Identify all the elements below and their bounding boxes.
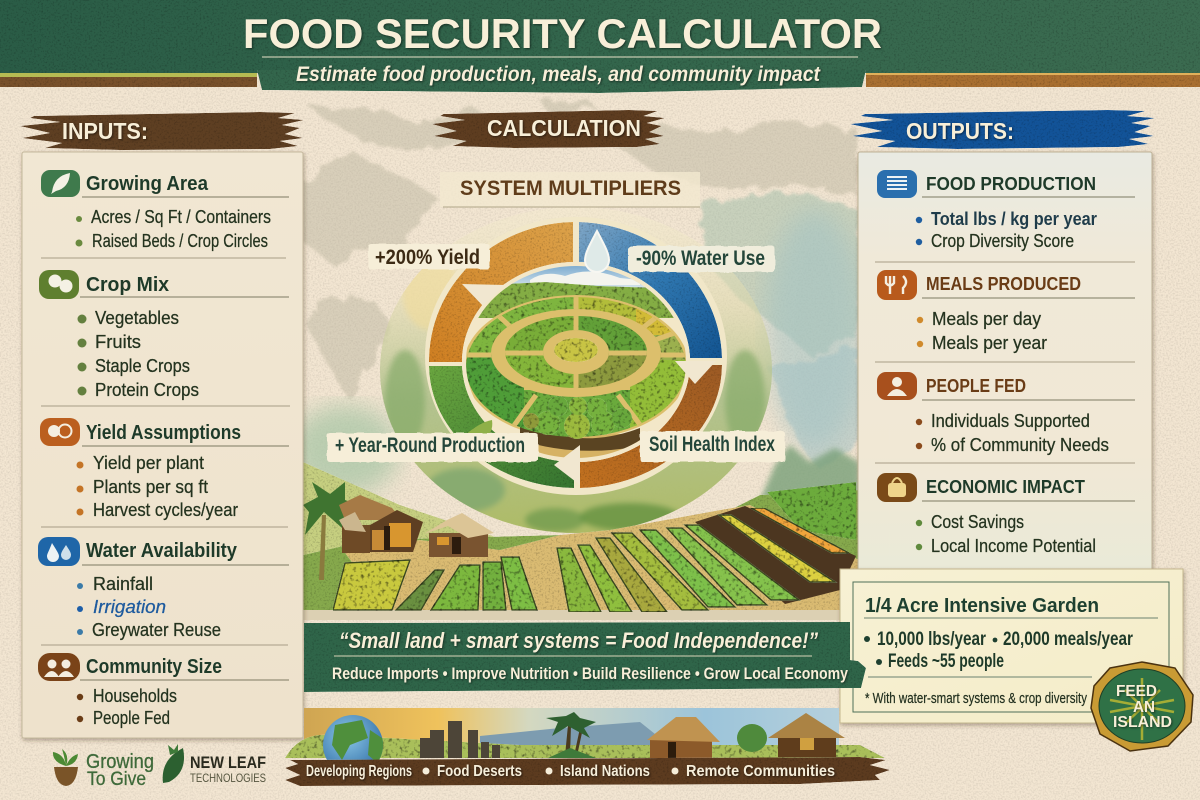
- arrow: ring right: [675, 361, 716, 384]
- pale green haze left: [290, 405, 400, 495]
- section: economic impact: Local Income Potential: [931, 536, 1096, 556]
- section: food production: Crop Diversity Score: [931, 231, 1074, 251]
- section: people fed: % of Community Needs: [931, 435, 1109, 455]
- ring segment: green production: [429, 366, 574, 488]
- label: soil health index: [640, 431, 785, 462]
- section: community size: People Fed: [93, 708, 170, 728]
- section: crop mix: Fruits: [95, 332, 141, 352]
- farm fields illustration: [303, 482, 859, 622]
- icon: people: [38, 653, 80, 681]
- tree line: [478, 282, 674, 318]
- section: meals produced: [877, 270, 1135, 353]
- icon: city towers: [420, 721, 500, 758]
- section: water availability: [38, 537, 289, 640]
- green block crops: [767, 482, 856, 540]
- inner beds: [505, 316, 647, 388]
- regions band: Developing Regions: [306, 763, 412, 780]
- icon: yield: [40, 418, 80, 446]
- logo: growing to give: [53, 749, 154, 790]
- arrow: ring bottom: [554, 445, 580, 485]
- callout: quarter acre garden: [840, 569, 1183, 723]
- section: meals produced: Meals per year: [932, 333, 1047, 353]
- badge: feed an island: AN: [1133, 699, 1155, 716]
- section: economic impact: Cost Savings: [931, 512, 1024, 532]
- arrow: ring top left: [462, 284, 505, 306]
- section: meals produced: MEALS PRODUCED: [926, 274, 1081, 294]
- section: growing area: Raised Beds / Crop Circles: [92, 231, 268, 251]
- icon: stilt hut: [768, 713, 845, 757]
- section: growing area: Growing Area: [86, 173, 209, 195]
- badge: feed an island: [1091, 662, 1193, 751]
- logo: growing to give: To Give: [87, 769, 146, 790]
- subtitle: Estimate food production, meals, and community impact: [296, 63, 821, 86]
- center bed: [554, 338, 598, 362]
- icon: leaves: [39, 270, 79, 299]
- section: yield assumptions: Harvest cycles/year: [93, 500, 238, 520]
- icon: list: [877, 170, 917, 198]
- section: yield assumptions: Yield Assumptions: [86, 422, 241, 444]
- icon: hut: [647, 717, 720, 758]
- scene ground: [285, 735, 885, 758]
- strip right: [866, 73, 1200, 87]
- heading: calculation: CALCULATION: [487, 115, 641, 141]
- section: community size: Households: [93, 686, 177, 706]
- label: year-round production: + Year-Round Production: [335, 434, 525, 457]
- teal haze: [765, 210, 865, 450]
- regions band: Food Deserts: [437, 763, 522, 780]
- logo: growing to give: Growing: [86, 751, 154, 773]
- regions band: Island Nations: [560, 763, 650, 780]
- inner bed spokes: [505, 316, 647, 388]
- section: crop mix: [39, 270, 289, 400]
- section: food production: Total lbs / kg per year: [931, 209, 1097, 229]
- icon: money bag: [877, 473, 917, 502]
- callout: quarter acre garden: 20,000 meals/year: [1003, 629, 1133, 650]
- ring segment: soil brown: [580, 365, 722, 488]
- gravel strip: [304, 610, 840, 620]
- ring outer border: [425, 217, 727, 495]
- scene sky: [304, 708, 839, 758]
- path ground: [463, 295, 689, 439]
- disc tree patches: [385, 250, 765, 532]
- outer soil: [520, 427, 640, 451]
- chart: system multipliers ring: [425, 217, 727, 495]
- section: food production: FOOD PRODUCTION: [926, 174, 1096, 194]
- callout heading: 1/4 Acre Intensive Garden: [865, 595, 1099, 617]
- faint outer disc: [380, 207, 772, 533]
- section: community size: [38, 653, 289, 728]
- icon: leaf: [464, 420, 492, 440]
- callout: quarter acre garden: 10,000 lbs/year: [877, 629, 986, 650]
- label: year-round production: [327, 433, 538, 462]
- icon: left hut: [339, 495, 423, 553]
- section: water availability: Water Availability: [86, 540, 238, 562]
- panel: outputs: [850, 110, 1155, 582]
- logo: new leaf technologies: TECHNOLOGIES: [190, 771, 266, 785]
- bushes: [523, 396, 632, 439]
- icon: globe: [323, 715, 383, 760]
- world map: [300, 100, 860, 470]
- badge: feed an island: FEED: [1116, 683, 1157, 700]
- callout: quarter acre garden: * With water-smart systems & crop diversity: [865, 690, 1087, 707]
- tan ground and path: [345, 505, 859, 612]
- outer beds: [466, 297, 686, 437]
- regions band: Remote Communities: [686, 763, 835, 780]
- logo: new leaf technologies: NEW LEAF: [190, 753, 266, 772]
- icon: tree: [737, 724, 767, 752]
- regions band: [285, 757, 890, 786]
- section: yield assumptions: Yield per plant: [93, 453, 204, 473]
- heading: outputs: OUTPUTS:: [906, 118, 1014, 144]
- left hillside: [304, 462, 495, 555]
- section: crop mix: Protein Crops: [95, 380, 199, 400]
- icon: leaf: [163, 748, 184, 783]
- icon: water drop: [585, 231, 609, 272]
- garden illustration: [466, 266, 686, 458]
- section: meals produced: Meals per day: [932, 309, 1041, 329]
- title: FOOD SECURITY CALCULATOR: [243, 10, 882, 57]
- label: soil health index: Soil Health Index: [649, 433, 775, 456]
- logo: new leaf technologies: [163, 744, 266, 785]
- section: water availability: Greywater Reuse: [92, 620, 221, 640]
- section: growing area: [41, 170, 289, 251]
- section: crop mix: Vegetables: [95, 308, 179, 328]
- background trees right: [758, 443, 858, 496]
- strip left: [0, 72, 257, 87]
- section: water availability: Irrigation: [93, 597, 166, 617]
- dark soil: [695, 506, 856, 604]
- callout: quarter acre garden: Feeds ~55 people: [888, 651, 1004, 672]
- icon: palm trees: [546, 712, 596, 758]
- heading: calculation: [432, 110, 665, 148]
- section: people fed: PEOPLE FED: [926, 376, 1026, 396]
- section: food production: [877, 170, 1135, 251]
- subtitle banner: [257, 70, 866, 93]
- benefits text: Reduce Imports • Improve Nutrition • Build Resilience • Grow Local Economy: [332, 664, 848, 683]
- green meadow: [303, 490, 859, 612]
- section: water availability: Rainfall: [93, 574, 153, 594]
- garden circle border: [462, 262, 690, 462]
- heading: outputs: [850, 110, 1155, 149]
- icon: right hut: [424, 513, 494, 557]
- section: people fed: [877, 372, 1135, 455]
- section: crop mix: Staple Crops: [95, 356, 190, 376]
- heading: system multipliers: [440, 172, 700, 207]
- icon: palm tree: [304, 482, 348, 580]
- section: crop mix: Crop Mix: [86, 274, 169, 296]
- section: community size: Community Size: [86, 656, 222, 678]
- header band: [0, 0, 1200, 93]
- heading: inputs: INPUTS:: [62, 118, 148, 144]
- section: economic impact: [877, 473, 1135, 556]
- outer bed spokes: [467, 297, 685, 426]
- ring segment: water blue: [579, 222, 722, 358]
- bottom scene strip: [285, 708, 890, 786]
- section: yield assumptions: Plants per sq ft: [93, 477, 208, 497]
- section: growing area: Acres / Sq Ft / Containers: [91, 207, 271, 227]
- icon: fork and knife: [877, 270, 917, 300]
- label: +200% yield: +200% Yield: [375, 246, 480, 269]
- quote banner: [304, 622, 866, 692]
- central illustration backdrop: [290, 100, 865, 560]
- heading: inputs: [20, 112, 304, 150]
- clouds: [530, 271, 640, 285]
- crop rows: [333, 508, 849, 612]
- icon: seedling bowl: [53, 749, 78, 786]
- section: economic impact: ECONOMIC IMPACT: [926, 477, 1085, 497]
- heading: system multipliers: SYSTEM MULTIPLIERS: [460, 177, 681, 200]
- section: yield assumptions: [40, 418, 289, 520]
- ring segment: yield orange: [429, 222, 573, 362]
- section: people fed: Individuals Supported: [931, 411, 1090, 431]
- icon: leaf: [41, 170, 80, 197]
- label: -90% water use: -90% Water Use: [636, 247, 765, 270]
- scene distant mountains: [480, 722, 660, 748]
- icon: water drops: [38, 537, 80, 566]
- panel: inputs: [20, 112, 304, 738]
- icon: person: [877, 372, 917, 400]
- quote text: “Small land + smart systems = Food Independence!”: [339, 628, 818, 653]
- badge: feed an island: ISLAND: [1113, 714, 1172, 731]
